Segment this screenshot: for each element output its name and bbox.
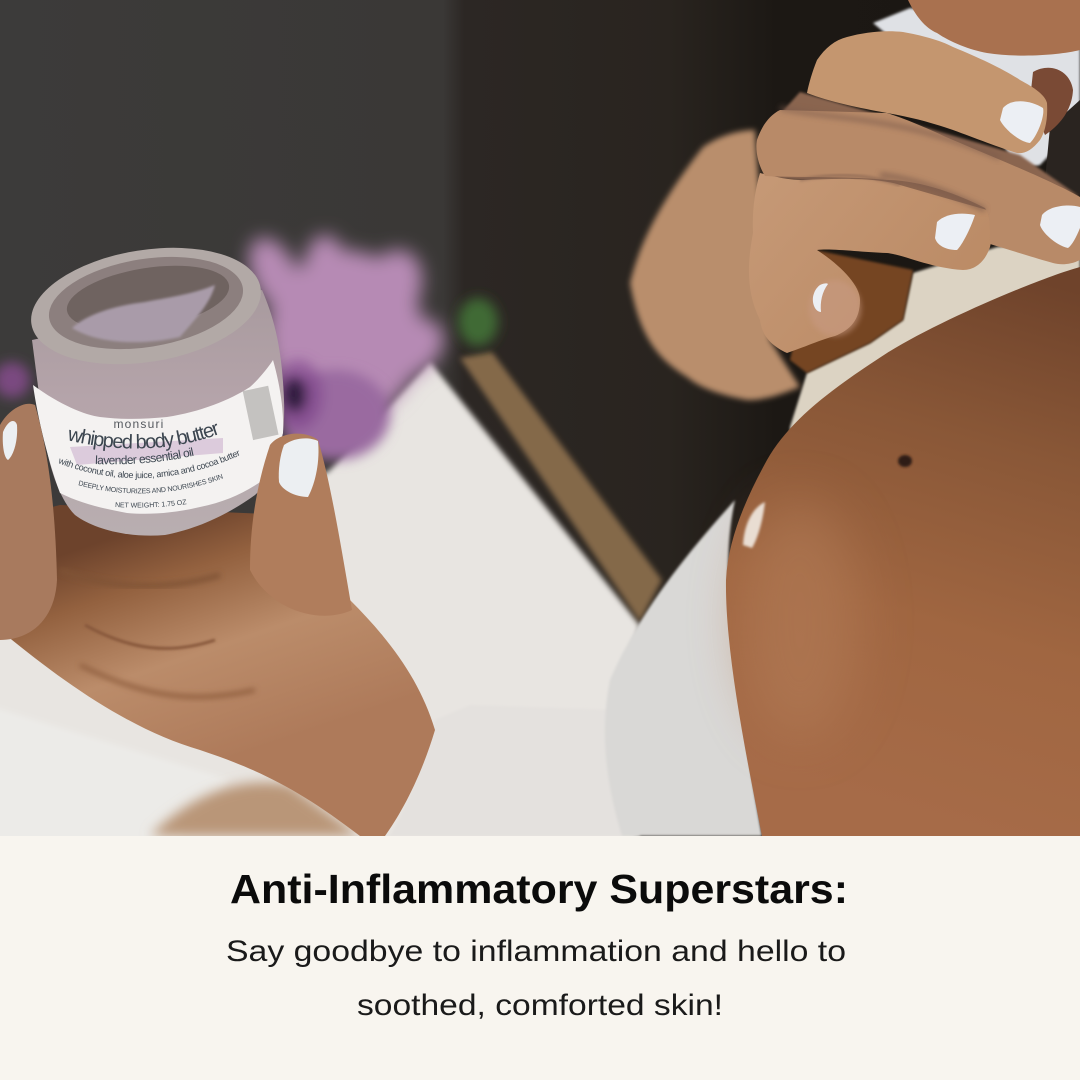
- chin: [908, 0, 1080, 56]
- middle finger: [756, 110, 1080, 264]
- jar glass rim: [23, 233, 269, 379]
- fingernails: [813, 101, 1080, 312]
- white robe: [605, 8, 1080, 836]
- palm wrinkles: [60, 570, 255, 697]
- index finger: [807, 31, 1047, 153]
- jar body: [32, 290, 284, 536]
- jar label: monsuri: [113, 417, 165, 431]
- upper arm: [630, 130, 800, 400]
- flower: [0, 229, 498, 460]
- inner palm shadow: [790, 250, 913, 373]
- wooden edge: [460, 352, 662, 622]
- left hand thumb and finger over jar: [0, 404, 352, 640]
- heading: Anti-Inflammatory Superstars:: [230, 866, 848, 912]
- robe sleeve near wrist: [390, 705, 640, 836]
- pinky and ring finger: [749, 173, 991, 353]
- jar label: DEEPLY MOISTURIZES AND NOURISHES SKIN: [78, 474, 223, 494]
- shoulder: [726, 267, 1080, 836]
- mole: [898, 455, 912, 467]
- pinky fingertip: [809, 280, 861, 336]
- white tub and surface: [0, 362, 640, 870]
- left hand palm and wrist: [0, 505, 435, 836]
- whipped butter: [72, 285, 215, 342]
- lower forearm in background: [150, 782, 360, 836]
- jar label: NET WEIGHT: 1.75 OZ: [116, 499, 186, 508]
- body line 1: Say goodbye to inflammation and hello to: [226, 935, 846, 968]
- jar label: lavender essential oil: [96, 447, 194, 464]
- shoulder highlight: [740, 500, 860, 740]
- ingredients column: [243, 386, 279, 440]
- body line 2: soothed, comforted skin!: [357, 989, 723, 1022]
- jar label: [33, 360, 284, 514]
- raised hand: [749, 31, 1080, 373]
- cream dab: [743, 502, 765, 548]
- background wall: [0, 0, 1080, 836]
- finger gap shading: [757, 92, 1080, 215]
- jar: [31, 248, 284, 536]
- jar label: with coconut oil, aloe juice, arnica and cocoa butter: [59, 450, 240, 480]
- jar label: whipped body butter: [69, 424, 218, 451]
- photo: woman applying body butter: [0, 0, 1080, 836]
- finger creases: [780, 108, 1000, 210]
- caption panel: [0, 836, 1080, 1080]
